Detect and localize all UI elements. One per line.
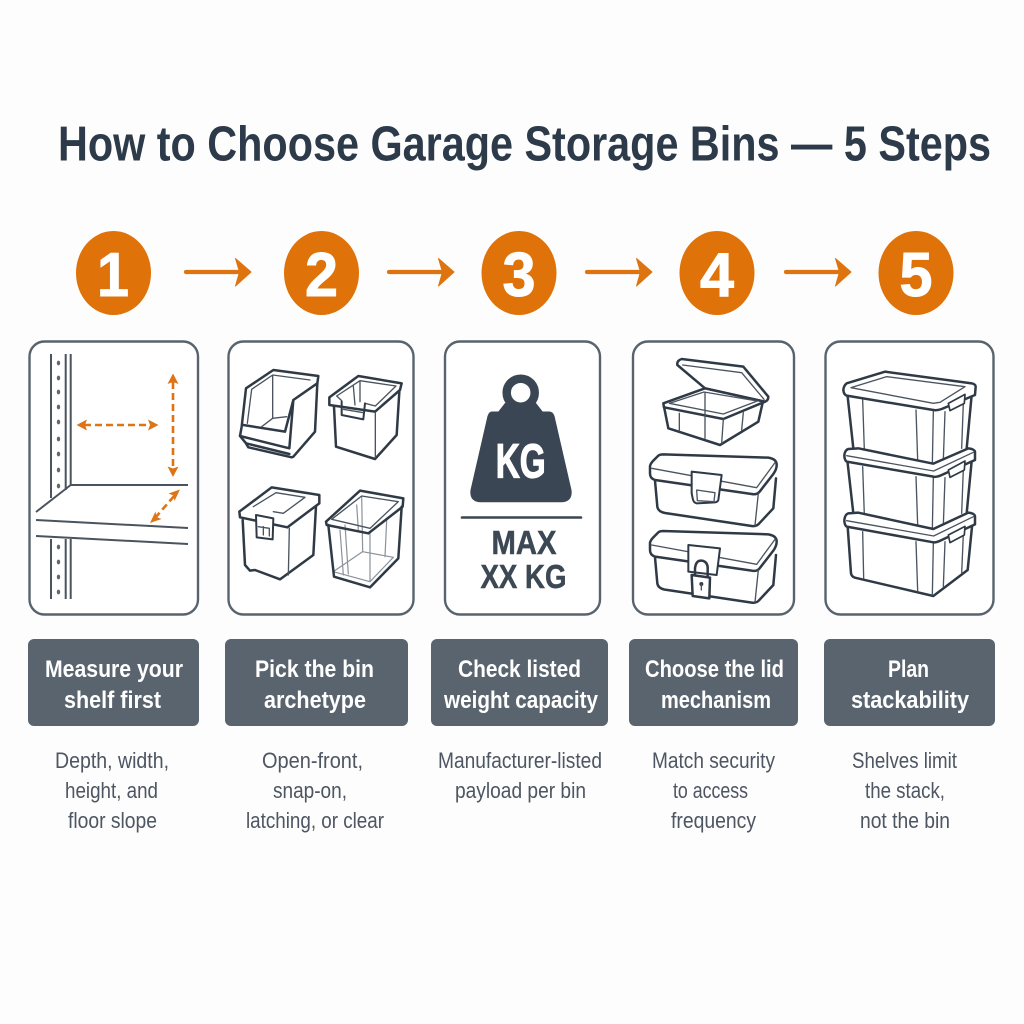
latching bin [239,487,319,579]
arrow 4 to 5 [786,258,851,286]
description 2 [246,748,384,833]
height arrow [168,374,178,477]
step number row [76,231,954,315]
label: choose the lid mechanism [629,639,798,726]
description 4 [652,748,775,833]
description 5: Shelves limit [852,748,957,773]
shelf illustration [36,354,188,599]
top row bins [240,370,402,459]
description 1: floor slope [68,808,157,833]
depth arrow [150,490,180,523]
step 3 text [431,639,608,803]
description 3: Manufacturer-listed [438,748,602,773]
step 5 badge: 5 [900,241,932,310]
arrow 2 to 3 [389,258,454,286]
description 4: to access [673,778,748,803]
label: check listed weight capacity [431,639,608,726]
description 4: Match security [652,748,775,773]
snap-on bin [329,376,402,459]
arrow 1 to 2 [186,258,251,286]
step 1 badge [76,231,151,315]
panel: bin archetypes [228,342,414,614]
step 5 text [824,639,995,833]
description 3: payload per bin [455,778,586,803]
description 3 [438,748,602,803]
label: measure your shelf first: shelf first [64,687,161,714]
icon: kg weight [470,379,572,502]
label: choose the lid mechanism: mechanism [661,687,771,714]
panel: measure shelf [30,342,198,614]
bottom bin [844,513,975,596]
step 2 badge [284,231,359,315]
label: check listed weight capacity: weight capacity [443,687,598,714]
hinged lid box [663,359,768,445]
description 1: height, and [65,778,158,803]
step 5 badge [878,231,954,315]
description 4: frequency [671,808,756,833]
stacked bins [843,372,976,596]
max weight label: MAX [492,524,556,561]
description 2: snap-on, [273,778,347,803]
step 3 badge [482,231,556,315]
arrow 3 to 4 [587,258,652,286]
step 3 badge: 3 [502,241,536,310]
step 1 text [28,639,199,833]
bottom row bins [239,487,403,587]
description 1: Depth, width, [55,748,169,773]
clear bin [326,491,403,587]
label: plan stackability [824,639,995,726]
label: measure your shelf first: Measure your [45,656,183,683]
step 4 text [629,639,798,833]
description 5: not the bin [860,808,950,833]
icon: kg weight: KG [496,436,546,488]
description 1 [55,748,169,833]
description 2: latching, or clear [246,808,384,833]
panel: stackability [826,342,994,614]
max weight rule [462,516,581,519]
step 4 badge [680,231,754,315]
panel: weight capacity [445,342,600,614]
width arrow [76,420,158,430]
panel: lid mechanisms [633,342,794,614]
label: pick the bin archetype [225,639,408,726]
clasp latch box [650,454,777,526]
description 2: Open-front, [262,748,363,773]
max weight label [480,524,566,595]
description 5 [852,748,957,833]
step 2 text [225,639,408,833]
label: check listed weight capacity: Check listed [458,656,581,683]
label: plan stackability: stackability [851,687,969,714]
open-front bin [240,370,318,457]
step 1 badge: 1 [97,241,129,310]
label: measure your shelf first [28,639,199,726]
top bin [843,372,976,464]
description 5: the stack, [865,778,945,803]
step 2 badge: 2 [305,241,338,310]
label: pick the bin archetype: Pick the bin [255,656,374,683]
middle bin [844,448,975,530]
padlock box [650,531,777,603]
max weight label: XX KG [480,558,566,595]
clasp and padlock boxes [650,454,777,603]
step 4 badge: 4 [700,241,735,310]
label: choose the lid mechanism: Choose the lid [645,656,784,683]
label: pick the bin archetype: archetype [264,687,366,714]
label: plan stackability: Plan [888,656,929,683]
